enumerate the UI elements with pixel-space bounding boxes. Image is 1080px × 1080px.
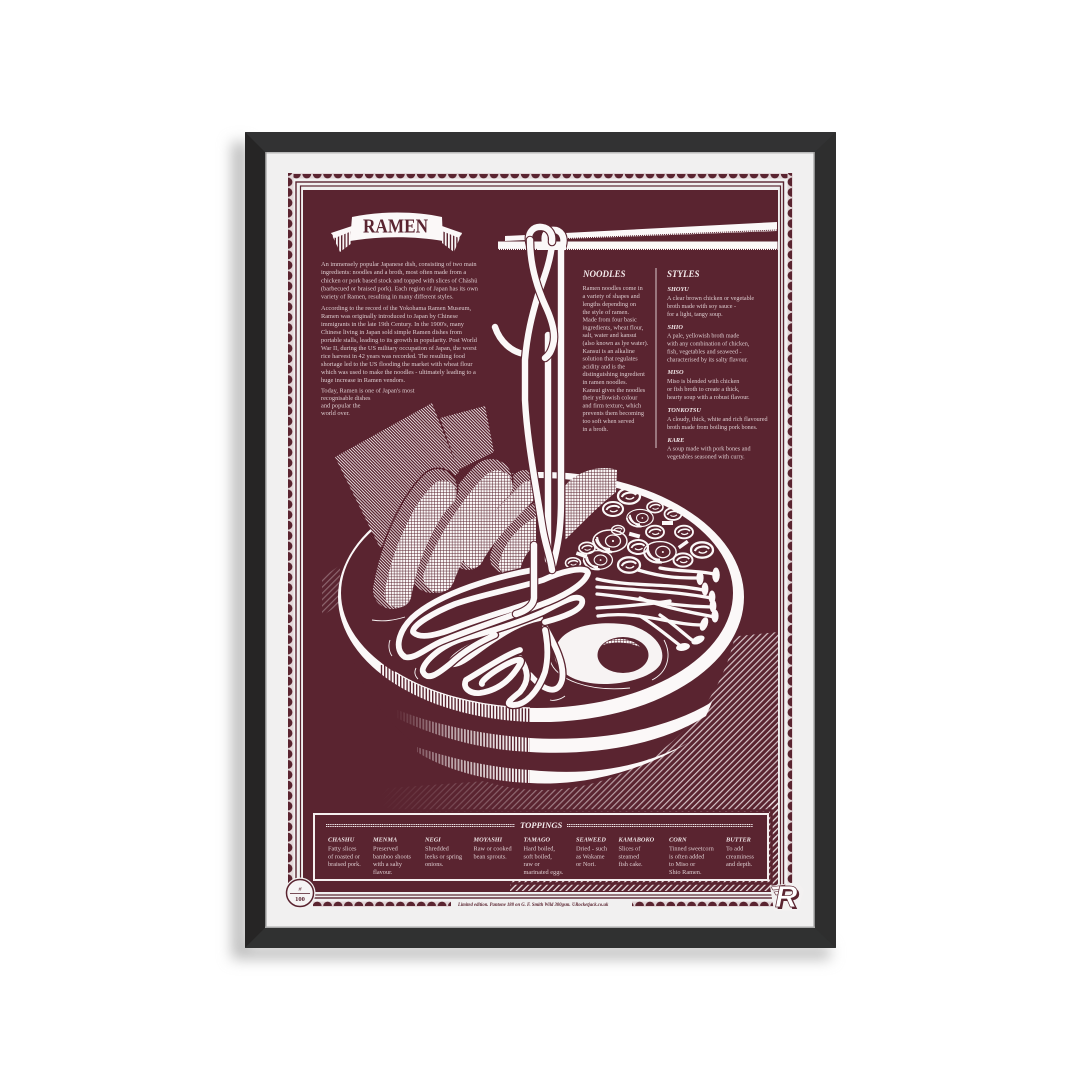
paper xyxy=(265,152,815,928)
corn: CORN xyxy=(669,836,687,844)
menma: with a salty xyxy=(373,861,403,868)
intro text block: According to the record of the Yokohama Ramen Museum, xyxy=(321,305,472,312)
table shadow hatching xyxy=(322,565,778,891)
chashu pork slices xyxy=(392,468,617,594)
intro text block: Chinese living in Japan sold simple Ramen dishes from xyxy=(321,329,462,336)
noodle coils xyxy=(372,569,588,705)
soft boiled egg xyxy=(550,623,668,689)
enoki mushrooms xyxy=(597,568,720,652)
noodles text column: lengths depending on xyxy=(582,301,637,308)
intro text block: world over. xyxy=(321,410,350,417)
styles text column: fish, vegetables and seaweed - xyxy=(667,348,742,356)
tamago: raw or xyxy=(524,861,541,868)
noodles text column: NOODLES xyxy=(582,269,626,279)
intro text block xyxy=(321,261,479,417)
styles text column: A soup made with pork bones and xyxy=(667,446,751,452)
bowl band upper solid xyxy=(530,702,712,753)
black picture frame xyxy=(245,132,836,948)
intro text block: which was used to make the noodles - ultimately leading to a xyxy=(321,369,476,376)
negi: leeks or spring xyxy=(425,853,463,860)
menma xyxy=(372,836,412,876)
chashu: braised pork. xyxy=(328,861,361,868)
chashu: CHASHU xyxy=(328,836,355,844)
styles text column: vegetables seasoned with curry. xyxy=(667,454,745,460)
moyashi: Raw or cooked xyxy=(474,846,512,852)
chopsticks xyxy=(498,222,778,250)
butter xyxy=(725,836,755,868)
seaweed: SEAWEED xyxy=(576,836,606,844)
tamago xyxy=(524,836,564,876)
noodles text column: and firm texture, which xyxy=(582,402,642,410)
butter: and depth. xyxy=(726,861,753,868)
bowl rim xyxy=(338,472,744,722)
seaweed: as Wakame xyxy=(576,853,605,860)
logo R xyxy=(770,879,804,916)
styles text column: with any combination of chicken, xyxy=(667,340,750,348)
styles text column: KARE xyxy=(666,437,684,444)
tamago: soft boiled, xyxy=(524,853,552,860)
chashu xyxy=(328,836,361,868)
poster decorative border xyxy=(288,173,793,907)
styles text column: MISO xyxy=(666,369,684,376)
styles text column: TONKOTSU xyxy=(668,407,701,414)
noodles text column: Ramen noodles come in xyxy=(582,285,644,292)
styles text column: hearty soup with a robust flavour. xyxy=(667,394,750,401)
logo wing xyxy=(771,885,785,895)
seaweed: or Nori. xyxy=(576,861,596,868)
edition credit: Limited edition. Pantone 188 on G. F. Smith Wild 300gsm. ©Rocketjack.co.uk xyxy=(457,902,609,908)
intro text block: ingredients: noodles and a broth, most often made from a xyxy=(321,269,466,276)
noodles text column: Kansui is an alkaline xyxy=(582,348,635,355)
noodles text column: (also known as lye water). xyxy=(582,340,649,347)
title: RAMEN xyxy=(363,216,428,238)
menma: flavour. xyxy=(373,869,393,876)
slice 4 xyxy=(505,517,542,565)
noodles text column: salt, water and kansui xyxy=(582,332,637,339)
noodles text column: too soft when served xyxy=(582,418,635,425)
intro text block: An immensely popular Japanese dish, consisting of two main xyxy=(321,261,477,268)
seaweed: Dried - such xyxy=(576,846,608,852)
maroon panel xyxy=(303,190,778,892)
column divider xyxy=(656,268,657,448)
intro text block: chicken or pork based stock and topped with slices of Chāshū xyxy=(321,277,478,284)
noodles text column: in a broth. xyxy=(582,426,608,433)
slice 3 xyxy=(468,485,529,558)
noodles text column: in ramen noodles. xyxy=(582,379,628,386)
slice right of noodles xyxy=(565,468,617,540)
styles text column: Miso is blended with chicken xyxy=(667,379,739,385)
corn: is often added xyxy=(669,853,705,860)
styles text column: A clear brown chicken or vegetable xyxy=(667,296,754,302)
styles text column: A cloudy, thick, white and rich flavoured xyxy=(667,416,768,423)
noodles text column: acidity and is the xyxy=(582,364,625,370)
moyashi: MOYASHI xyxy=(472,836,503,844)
intro text block: huge increase in Ramen vendors. xyxy=(321,377,405,384)
intro text block: War II, during the US military occupation of Japan, the worst xyxy=(321,345,477,352)
corn: to Miso or xyxy=(669,861,696,868)
styles text column: SHIO xyxy=(668,324,683,331)
kamaboko: steamed xyxy=(618,853,640,860)
hook strand xyxy=(495,327,524,354)
noodles text column: distinguishing ingredient xyxy=(582,371,645,378)
styles text column: STYLES xyxy=(667,269,700,279)
noodles text column: Made from four basic xyxy=(582,316,637,324)
intro text block: Today, Ramen is one of Japan's most xyxy=(321,388,415,394)
noodles text column: ingredients, wheat flour, xyxy=(582,324,644,332)
styles text column: broth made with soy sauce - xyxy=(667,304,736,310)
styles text column: characterised by its salty flavour. xyxy=(667,356,748,364)
corn xyxy=(669,836,715,876)
tamago: TAMAGO xyxy=(524,836,551,844)
intro text block: and popular the xyxy=(321,402,361,410)
seaweed xyxy=(576,836,608,868)
styles text column xyxy=(666,269,768,460)
tamago: marinated eggs. xyxy=(524,869,564,876)
kamaboko xyxy=(618,836,655,868)
negi: NEGI xyxy=(424,836,441,844)
bowl band lower solid xyxy=(530,742,690,783)
butter: BUTTER xyxy=(725,836,751,844)
butter: creaminess xyxy=(726,853,755,860)
noodles text column: a variety of shapes and xyxy=(582,293,641,300)
negi: Shredded xyxy=(425,846,450,852)
corn: Shio Ramen. xyxy=(669,869,702,876)
title ribbon xyxy=(331,212,462,252)
moyashi: bean sprouts. xyxy=(474,853,507,860)
noodles lifted by chopsticks xyxy=(495,227,566,614)
corn: Tinned sweetcorn xyxy=(669,846,715,852)
intro text block: immigrants in the late 19th Century. In the 1900's, many xyxy=(321,321,465,328)
styles text column: for a light, tangy soup. xyxy=(667,311,723,318)
intro text block: portable stalls, leading to its growth in popularity. Post World xyxy=(321,337,478,344)
chashu: Fatty slices xyxy=(328,846,357,852)
rim inner line xyxy=(395,672,530,708)
intro text block: (barbecued or braised pork). Each region of Japan has its own xyxy=(321,285,479,292)
bowl body xyxy=(345,630,736,790)
slice 1 xyxy=(392,488,443,594)
menma: MENMA xyxy=(372,836,397,844)
intro text block: Ramen was originally introduced to Japan by Chinese xyxy=(321,313,458,320)
intro text block: recognisable dishes xyxy=(321,395,371,402)
edition number badge xyxy=(284,878,316,908)
menma: Preserved xyxy=(373,846,399,852)
frame shadow xyxy=(232,142,830,959)
rim stripes lower left xyxy=(380,665,530,725)
negi xyxy=(424,836,463,868)
logo R: R xyxy=(777,881,800,916)
chashu: of roasted or xyxy=(328,853,361,860)
negi and kamaboko toppings xyxy=(566,488,713,573)
intro text block: variety of Ramen, resulting in many different styles. xyxy=(321,294,454,300)
kamaboko: fish cake. xyxy=(618,861,643,868)
logo R: R xyxy=(775,879,798,914)
tamago: Hard boiled, xyxy=(524,846,555,852)
edition number badge: 100 xyxy=(295,896,305,903)
intro text block: shortage led to the US flooding the market with wheat flour xyxy=(321,361,473,368)
nori sheets xyxy=(335,403,494,548)
noodles text column: Kansui gives the noodles xyxy=(582,387,646,394)
styles text column: A pale, yellowish broth made xyxy=(667,334,739,340)
noodles text column: their yellowish colour xyxy=(582,394,638,402)
noodles text column: solution that regulates xyxy=(582,356,638,362)
styles text column: or fish broth to create a thick, xyxy=(667,386,740,393)
noodles text column xyxy=(582,269,649,433)
moyashi xyxy=(472,836,512,860)
edition number badge: # xyxy=(298,887,302,893)
ramen bowl xyxy=(338,472,744,790)
noodles text column: prevents them becoming xyxy=(582,410,644,417)
kamaboko: KAMABOKO xyxy=(618,836,655,844)
styles text column: SHOYU xyxy=(668,286,689,293)
soup surface xyxy=(341,478,733,708)
toppings panel xyxy=(310,810,772,884)
negi: onions. xyxy=(425,861,444,868)
noodles text column: the style of ramen. xyxy=(582,309,629,316)
slice 2 xyxy=(432,480,497,577)
intro text block: rice harvest in 42 years was recorded. The resulting food xyxy=(321,353,466,360)
bowl bands striped fade xyxy=(395,709,530,783)
menma: bamboo shoots xyxy=(373,853,412,860)
toppings heading rules xyxy=(326,824,753,826)
butter: To add xyxy=(726,846,744,852)
styles text column: broth made from boiling pork bones. xyxy=(667,424,758,431)
kamaboko: Slices of xyxy=(618,846,641,852)
toppings heading: TOPPINGS xyxy=(520,820,563,830)
